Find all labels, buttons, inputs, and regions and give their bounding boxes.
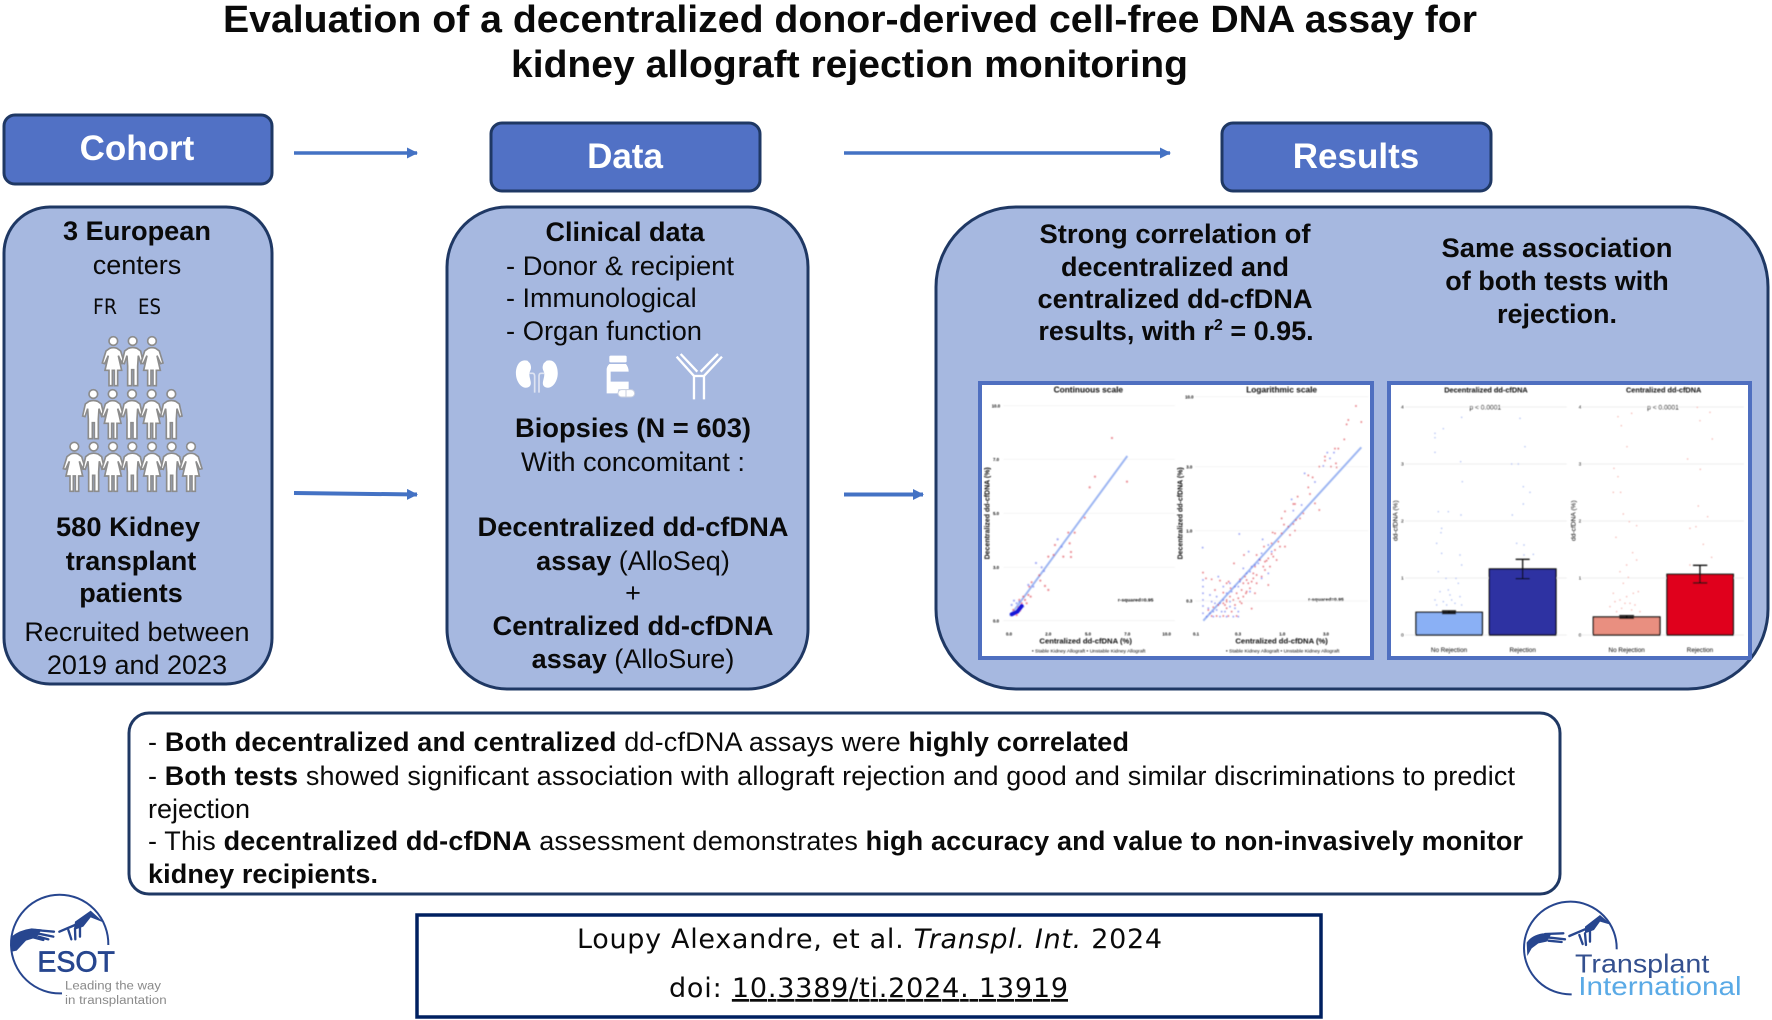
chart: bar plots: Decentralized dd-cfDNA bbox=[1444, 385, 1528, 394]
text: correlation finding: 2 bbox=[1214, 317, 1223, 334]
chart: bar plots: No Rejection bbox=[1431, 647, 1468, 654]
text: recruitment: 2019 and 2023 bbox=[47, 650, 227, 680]
chart: scatter plots: 3.0 bbox=[1186, 464, 1193, 469]
arrow: data to results bottom bbox=[844, 492, 923, 496]
chart: scatter plots: • Stable Kidney Allograft • Unstable Kidney Allograft bbox=[1226, 648, 1340, 654]
chart: bar plots: 0 bbox=[1579, 633, 1582, 639]
chart: scatter plots bbox=[980, 383, 1372, 658]
text: association finding bbox=[1442, 233, 1672, 329]
text: country codes: FR bbox=[93, 295, 117, 319]
title bbox=[223, 0, 1477, 86]
text: association finding: rejection. bbox=[1497, 299, 1617, 329]
text: correlation finding: centralized dd-cfDNA bbox=[1038, 284, 1312, 314]
heading: cohort: Cohort bbox=[80, 129, 195, 168]
text: centers: 3 European bbox=[63, 216, 211, 246]
text: conclusion 3 bbox=[148, 826, 1523, 889]
logo: ESOT: in transplantation bbox=[65, 993, 167, 1007]
chart: scatter plots: 1.0 bbox=[1279, 631, 1286, 636]
text: centers: centers bbox=[93, 250, 181, 280]
logo: Transplant International: Transplant bbox=[1575, 949, 1710, 979]
chart: scatter plots: 10.0 bbox=[992, 403, 1001, 408]
text: assays: + bbox=[625, 578, 641, 608]
chart: bar plots: 1 bbox=[1579, 576, 1582, 582]
text: country codes: ES bbox=[138, 295, 161, 319]
text: assays: Centralized dd-cfDNA bbox=[492, 611, 774, 641]
chart: bar plots: 4 bbox=[1579, 405, 1582, 411]
chart: scatter plots: 0.0 bbox=[1006, 631, 1013, 636]
chart: bar plots: No Rejection bbox=[1609, 647, 1645, 654]
text: correlation finding: results, with r bbox=[1038, 316, 1214, 346]
text: biopsies: With concomitant : bbox=[521, 447, 745, 477]
chart: scatter plots: 5.0 bbox=[1085, 631, 1092, 636]
text: assays bbox=[478, 512, 788, 674]
text: centers bbox=[63, 216, 211, 280]
chart: bar plots: 2 bbox=[1401, 519, 1404, 525]
icon: antibody bbox=[677, 354, 722, 399]
chart: bar plots: 1 bbox=[1401, 576, 1404, 582]
text: conclusion 2 bbox=[148, 761, 1515, 824]
chart: bar plots: 2 bbox=[1579, 519, 1582, 525]
chart: bar plots: Centralized dd-cfDNA bbox=[1626, 385, 1702, 394]
text: assays: assay (AlloSure) bbox=[532, 644, 734, 674]
heading: cohort bbox=[4, 115, 272, 184]
text: conclusion 2: - Both tests showed significant association with allograft rejection and good and similar discriminations to predict bbox=[148, 761, 1515, 791]
chart: bar plots: Rejection bbox=[1687, 647, 1714, 654]
chart: scatter plots: • Stable Kidney Allograft • Unstable Kidney Allograft bbox=[1032, 648, 1146, 654]
chart: scatter plots: 5.0 bbox=[993, 511, 1000, 516]
text: correlation finding: decentralized and bbox=[1061, 252, 1289, 282]
text: conclusion 3: kidney recipients. bbox=[148, 859, 378, 889]
panel: results bbox=[936, 207, 1768, 689]
title: kidney allograft rejection monitoring bbox=[511, 44, 1188, 86]
text: clinical data: - Immunological bbox=[506, 283, 697, 313]
chart: scatter plots: r-squared=0.95 bbox=[1118, 598, 1154, 604]
text: patients: 580 Kidney bbox=[56, 512, 200, 542]
arrow: data to results top bbox=[844, 151, 1170, 155]
icon: Transplant International hands bbox=[1527, 915, 1612, 956]
chart: scatter plots: 0.0 bbox=[993, 618, 1000, 623]
panel: cohort bbox=[4, 207, 272, 684]
panel: conclusions bbox=[129, 713, 1560, 894]
chart: bar plots bbox=[1389, 383, 1750, 658]
icon: kidneys bbox=[516, 360, 558, 393]
citation box bbox=[417, 915, 1321, 1017]
text: country codes bbox=[93, 295, 161, 319]
chart: bar plots: dd-cfDNA (%) bbox=[1570, 500, 1577, 541]
citation box: doi: 10.3389/ti.2024. 13919 bbox=[669, 973, 1068, 1004]
chart: bar plots: p < 0.0001 bbox=[1647, 404, 1679, 411]
chart: scatter plots: 2.0 bbox=[1045, 631, 1052, 636]
text: association finding: of both tests with bbox=[1445, 266, 1669, 296]
text: clinical data bbox=[506, 217, 734, 346]
text: recruitment bbox=[24, 617, 250, 680]
text: correlation finding: = 0.95. bbox=[1223, 316, 1314, 346]
text: patients bbox=[56, 512, 200, 608]
text: assays: assay (AlloSeq) bbox=[536, 546, 730, 576]
text: recruitment: Recruited between bbox=[24, 617, 250, 647]
text: clinical data: - Organ function bbox=[506, 316, 702, 346]
text: clinical data: Clinical data bbox=[545, 217, 706, 247]
text: conclusion 2: rejection bbox=[148, 794, 250, 824]
chart: scatter plots: 7.0 bbox=[1124, 631, 1131, 636]
heading: results: Results bbox=[1293, 137, 1419, 176]
chart: scatter plots: 7.0 bbox=[993, 457, 1000, 462]
chart: bar plots: dd-cfDNA (%) bbox=[1393, 500, 1400, 541]
text: patients: patients bbox=[79, 578, 183, 608]
chart: scatter plots: 3.0 bbox=[993, 565, 1000, 570]
icon: ESOT hands bbox=[11, 911, 104, 952]
chart: scatter plots: 1.0 bbox=[1186, 528, 1193, 533]
text: correlation finding bbox=[1038, 219, 1314, 346]
logo: ESOT: ESOT bbox=[37, 947, 115, 979]
text: association finding: Same association bbox=[1442, 233, 1672, 263]
chart: scatter plots: r-squared=0.95 bbox=[1308, 597, 1344, 603]
chart: scatter plots: Centralized dd-cfDNA (%) bbox=[1235, 636, 1328, 645]
panel: data bbox=[447, 207, 808, 689]
text: assays: Decentralized dd-cfDNA bbox=[478, 512, 788, 542]
text: biopsies: Biopsies (N = 603) bbox=[515, 413, 751, 443]
heading: data: Data bbox=[587, 137, 663, 176]
chart: scatter plots: Logarithmic scale bbox=[1246, 384, 1317, 394]
icon: medication bbox=[607, 356, 635, 397]
citation box: Loupy Alexandre, et al. Transpl. Int. 2024 bbox=[577, 924, 1162, 955]
chart: scatter plots: Decentralized dd-cfDNA (%) bbox=[984, 467, 991, 559]
chart: scatter plots: 0.1 bbox=[1193, 631, 1200, 636]
title: Evaluation of a decentralized donor-derived cell-free DNA assay for bbox=[223, 0, 1477, 41]
arrow: cohort to data top bbox=[294, 151, 417, 155]
chart: scatter plots: 10.0 bbox=[1162, 631, 1171, 636]
chart: bar plots: 0 bbox=[1401, 633, 1404, 639]
text: conclusion 3: - This decentralized dd-cfDNA assessment demonstrates high accuracy and value to non-invasively monitor bbox=[148, 826, 1523, 856]
text: conclusion 1: - Both decentralized and centralized dd-cfDNA assays were highly correlated bbox=[148, 727, 1129, 757]
chart: bar plots: p < 0.0001 bbox=[1469, 404, 1501, 411]
chart: scatter plots: 0.3 bbox=[1186, 599, 1193, 604]
arrow: cohort to data bottom bbox=[294, 493, 417, 494]
chart: scatter plots: Continuous scale bbox=[1054, 384, 1123, 394]
text: biopsies bbox=[515, 413, 751, 477]
icon: people pyramid bbox=[63, 337, 202, 491]
chart: bar plots: 4 bbox=[1401, 405, 1404, 411]
chart: scatter plots: 10.0 bbox=[1185, 394, 1194, 399]
text: correlation finding: Strong correlation of bbox=[1040, 219, 1312, 249]
chart: bar plots: 3 bbox=[1401, 462, 1404, 468]
text: patients: transplant bbox=[66, 546, 196, 576]
heading: results bbox=[1222, 123, 1491, 191]
heading: data bbox=[491, 123, 760, 191]
chart: scatter plots: Centralized dd-cfDNA (%) bbox=[1039, 636, 1132, 645]
logo: ESOT bbox=[11, 895, 167, 1007]
text: clinical data: - Donor & recipient bbox=[506, 251, 734, 281]
logo: Transplant International bbox=[1524, 902, 1742, 1001]
chart: bar plots: Rejection bbox=[1509, 647, 1536, 654]
chart: scatter plots: Decentralized dd-cfDNA (%) bbox=[1178, 467, 1185, 559]
chart: scatter plots: 0.3 bbox=[1235, 631, 1242, 636]
logo: Transplant International: International bbox=[1578, 971, 1742, 1001]
chart: bar plots: 3 bbox=[1579, 462, 1582, 468]
logo: ESOT: Leading the way bbox=[65, 978, 162, 992]
chart: scatter plots: 3.0 bbox=[1323, 631, 1330, 636]
